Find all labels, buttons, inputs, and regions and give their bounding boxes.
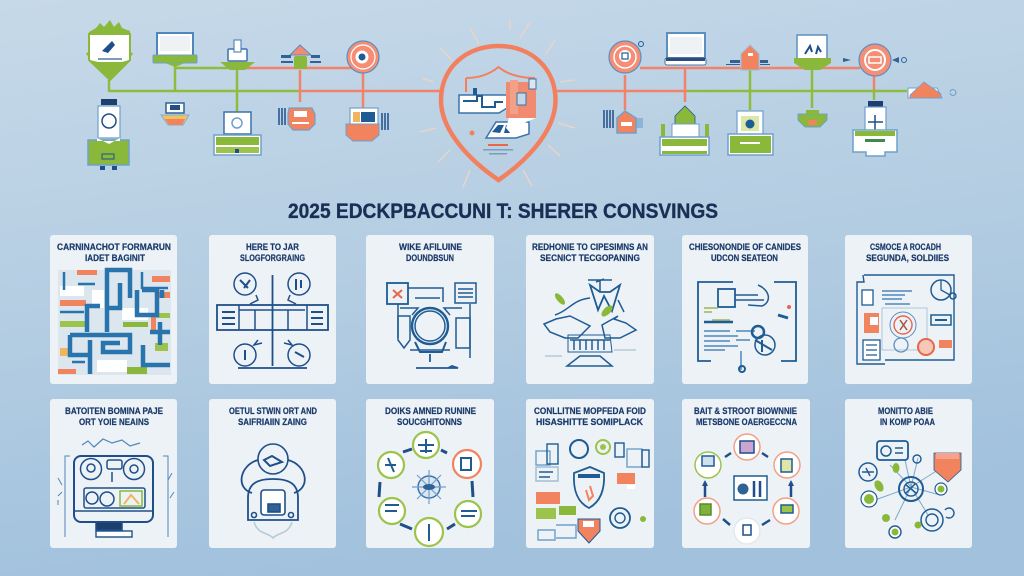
panel: capsule device <box>209 399 336 548</box>
panel: dashboard sheets: SEGUNDA, SOLDIIES <box>866 253 949 264</box>
panel: capsule device: SAIFRIAIIN ZAING <box>238 417 307 428</box>
title: 2025 EDCKPBACCUNI T: SHERER CONSVINGS <box>288 200 718 223</box>
icon: lower small tray <box>161 103 189 125</box>
panel: device with lens <box>366 235 494 384</box>
panel: cross diagram: SLOGFORGRAING <box>240 253 305 264</box>
green leaves <box>553 292 614 318</box>
panel: dashboard sheets <box>845 235 972 384</box>
hexagon illustration <box>544 279 636 366</box>
icon: left orange dial <box>347 41 379 73</box>
panel heading: CHIESONONDIE OF CANIDES <box>689 242 801 253</box>
icon: lower orange bag <box>279 108 315 130</box>
icon: right lower green tower <box>660 106 709 155</box>
icon: right lower green screen <box>728 111 773 155</box>
panel heading: WIKE AFILUINE <box>399 242 462 253</box>
panel: maze: IADET BAGINIT <box>85 253 145 264</box>
icon: right lower green bowl <box>798 110 827 127</box>
panel: hexagon robot <box>526 235 654 384</box>
icon: right laptop <box>665 33 706 65</box>
connector lines <box>109 66 907 112</box>
panel: ring cycle <box>366 399 494 548</box>
panel: ring cycle: SOUCGHITONNS <box>397 417 462 428</box>
panel heading: OETUL STWIN ORT AND <box>229 406 317 417</box>
icon: left pedestal <box>220 40 255 70</box>
maze illustration <box>58 270 171 375</box>
capsule illustration <box>242 444 305 538</box>
icon: left orange house <box>281 45 321 69</box>
ring illustration <box>378 432 481 546</box>
icon: right tag <box>908 82 956 98</box>
collage illustration <box>536 440 649 540</box>
shield: left device <box>459 88 507 113</box>
panel: hub network: IN KOMP POAA <box>880 417 935 428</box>
panel heading: MONITTO ABIE <box>878 406 933 417</box>
icon: central shield <box>420 20 575 187</box>
panel heading: DOIKS AMNED RUNINE <box>385 406 476 417</box>
shield: hand device <box>486 122 529 138</box>
icon: right framed screen <box>794 35 831 70</box>
panel: shield collage <box>526 399 654 548</box>
panel heading: BATOITEN BOMINA PAJE <box>65 406 163 417</box>
panel: monitor: ORT YOIE NEAINS <box>79 417 149 428</box>
icon: right lower bottle <box>853 101 897 156</box>
dashboard illustration <box>857 275 956 364</box>
shield: small caption <box>483 144 513 154</box>
panel heading: REDHONIE TO CIPESIMNS AN <box>532 242 648 253</box>
icon: right orange dial <box>609 41 644 73</box>
panel: maze <box>50 235 177 384</box>
panel: document frame: UDCON SEATEON <box>711 253 778 264</box>
panel: hub network <box>845 399 972 548</box>
panel: cross diagram <box>209 235 336 384</box>
icon: lower orange screen <box>346 108 388 141</box>
panel heading: HERE TO JAR <box>246 242 299 253</box>
top network diagram <box>86 20 956 187</box>
panel: six-node loop: METSBONE OAERGECCNA <box>696 417 797 428</box>
panel: monitor <box>50 399 177 548</box>
panel: shield collage: HISASHITTE SOMIPLACK <box>536 417 643 428</box>
icon: right orange house <box>726 45 770 70</box>
icon: left funnel with grass <box>86 20 133 80</box>
panel heading: CARNINACHOT FORMARUN <box>57 242 171 253</box>
lens illustration <box>387 283 476 368</box>
panel: six-node loop <box>682 399 810 548</box>
icon: left bottle with green base <box>88 99 129 170</box>
icon: left laptop <box>153 33 197 67</box>
panel: document frame <box>682 235 808 384</box>
monitor illustration <box>58 439 174 537</box>
panel: device with lens: DOUNDBSUN <box>406 253 454 264</box>
icon: right orange dial with handles <box>843 44 906 76</box>
hub illustration <box>859 441 954 538</box>
shield: factory building <box>506 79 536 135</box>
icon: right lower barcode house <box>604 110 643 133</box>
cross illustration <box>217 273 328 368</box>
panel heading: BAIT & STROOT BIOWNNIE <box>694 406 797 417</box>
panel: hexagon robot: SECNICT TECGOPANING <box>540 253 640 264</box>
panel heading: CSMOCE A ROCADH <box>870 242 941 253</box>
panel heading: CONLLITNE MOPFEDA FOID <box>534 406 646 417</box>
loop illustration <box>694 434 800 544</box>
icon: lower monitor with green base <box>214 112 261 155</box>
document illustration <box>698 282 796 372</box>
